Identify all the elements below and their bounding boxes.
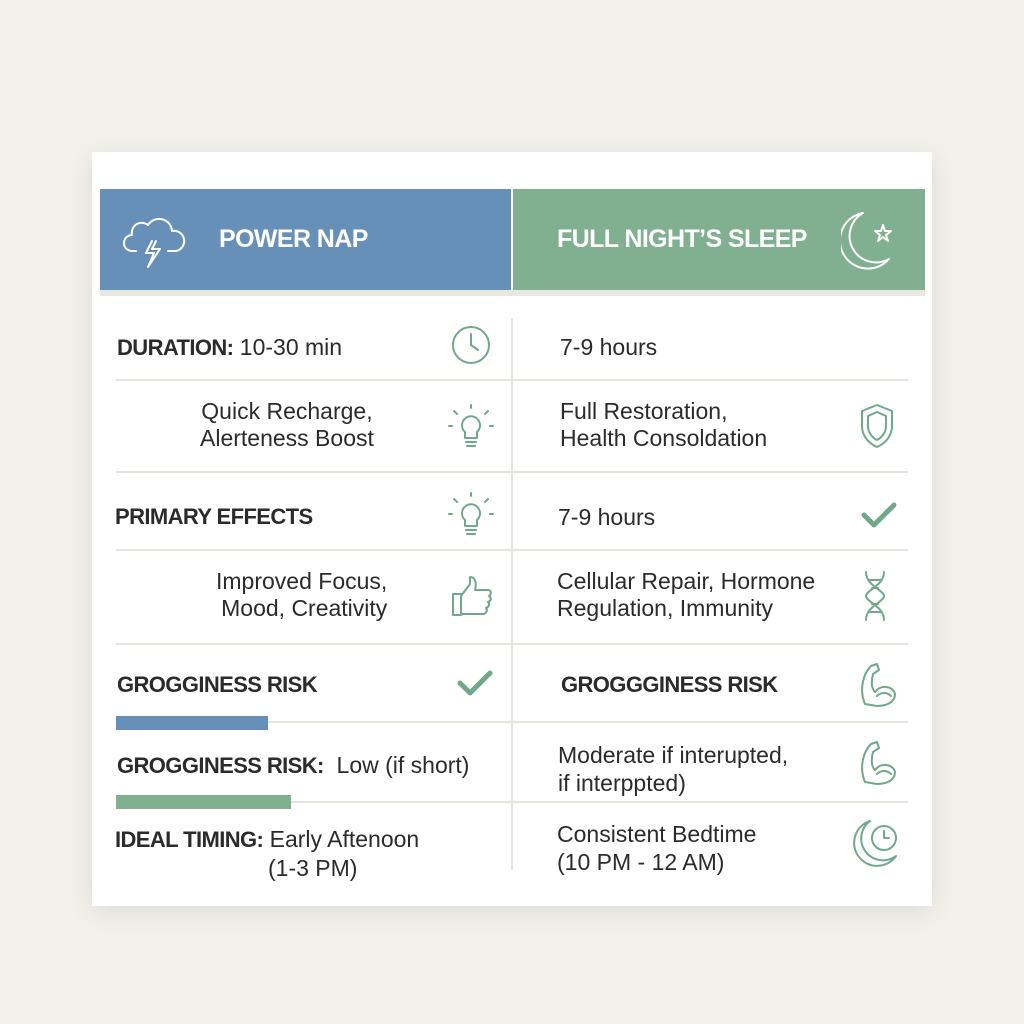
row: improved focus [216, 568, 388, 621]
icon: check [458, 670, 492, 696]
row: ideal timing: (1-3 PM) [268, 855, 357, 881]
text: 7-9 hours [560, 334, 657, 360]
icon: muscle [861, 663, 896, 707]
row: duration: DURATION: 10-30 min [117, 334, 342, 360]
dividers [116, 379, 908, 381]
icon: dna [865, 571, 885, 621]
header: full night's sleep [513, 189, 925, 290]
text: Cellular Repair, Hormone [557, 568, 815, 594]
icon: check [862, 502, 896, 528]
icon: bulb [448, 404, 494, 447]
icon: muscle [861, 741, 896, 785]
text: 7-9 hours [558, 504, 655, 530]
row: improved focus: Mood, Creativity [221, 595, 387, 621]
text: Health Consoldation [560, 425, 767, 451]
icon: moon clock [853, 820, 897, 867]
row: ideal timing: IDEAL TIMING: Early Aftenoon [115, 826, 419, 852]
icon: cloud lightning [123, 218, 186, 268]
card [92, 152, 932, 906]
row: primary effects: PRIMARY EFFECTS [115, 504, 313, 529]
icon: clock [452, 326, 490, 364]
bar: blue [116, 716, 268, 730]
header title: POWER NAP [219, 225, 368, 253]
row: grogginess risk low: GROGGINESS RISK: Low (if short) [117, 752, 469, 778]
bar: green [116, 795, 291, 809]
text: if interppted) [558, 770, 686, 796]
icon: thumbs up [452, 576, 492, 616]
text: Regulation, Immunity [557, 595, 773, 621]
text: GROGGGINESS RISK [561, 672, 778, 697]
icon: shield [861, 404, 893, 448]
text: Consistent Bedtime [557, 821, 756, 847]
header title: FULL NIGHT’S SLEEP [557, 225, 807, 253]
icon: moon star [841, 212, 892, 270]
text: Moderate if interupted, [558, 742, 788, 768]
text: (10 PM - 12 AM) [557, 849, 724, 875]
row: recharge: Quick Recharge, [201, 398, 373, 424]
row: recharge [200, 398, 374, 451]
text: Full Restoration, [560, 398, 727, 424]
row: improved focus: Improved Focus, [216, 568, 387, 594]
header: power nap [100, 189, 511, 290]
row: recharge: Alerteness Boost [200, 425, 374, 451]
row: ideal timing [115, 826, 419, 881]
row: grogginess risk: GROGGINESS RISK [117, 672, 317, 697]
icon: bulb [448, 492, 494, 535]
